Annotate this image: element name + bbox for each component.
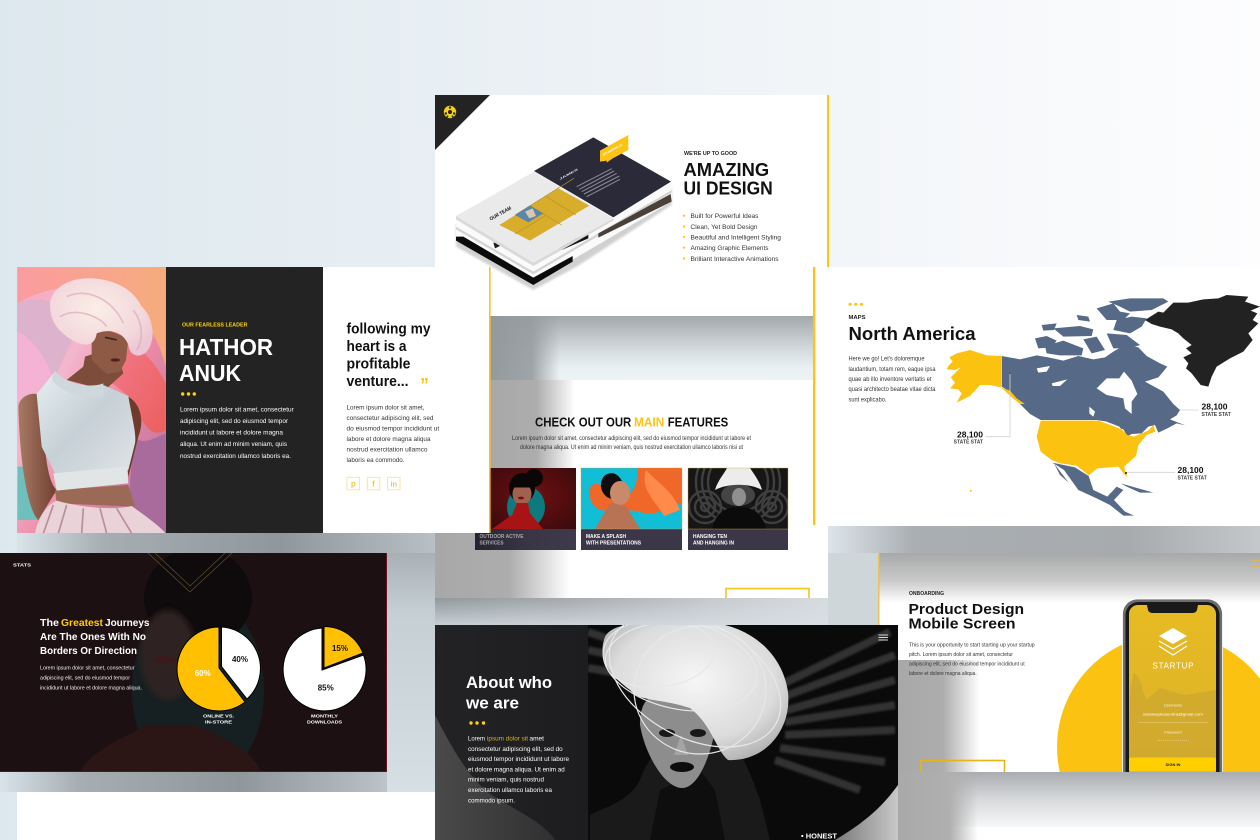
phone mockup [1122, 599, 1223, 772]
text: about body: exercitation ullamco laboris ea [468, 787, 552, 794]
region: Mexico and Central America [1052, 463, 1153, 516]
heading: greatest journeys: Borders Or Direction [40, 645, 137, 657]
isometric slide stack illustration: OUR TEAM [489, 206, 513, 222]
phone mockup: sandeepkasundra@gmail.com [1143, 712, 1204, 716]
isometric slide stack illustration: STUNNING UI [602, 143, 623, 157]
pie chart: online vs in-store: 60% [195, 669, 211, 678]
text: features intro [512, 436, 751, 451]
panel: onboarding slide [878, 553, 1260, 772]
region: Alaska [947, 350, 1025, 404]
panel: about who we are slide [435, 625, 898, 840]
text: onboarding body: labore et dolore magna aliqua. [909, 671, 977, 677]
card: hanging ten: AND HANGING IN [693, 540, 734, 546]
text: eyebrow: WE'RE UP TO GOOD [684, 151, 737, 157]
icon: menu [1251, 560, 1260, 567]
callout: west stat: 28,100 [957, 430, 983, 440]
card: make a splash [581, 468, 682, 550]
icon: startup stacked layers logo [1159, 628, 1187, 655]
callout: east stat [1202, 402, 1231, 418]
text: map description: laudantium, totam rem, eaque ipsa [848, 367, 936, 373]
text: leader bio: adipiscing elit, sed do eiusmod tempor [180, 418, 289, 425]
map of North America [947, 295, 1260, 516]
text: quote body: consectetur adipiscing elit, sed [346, 415, 434, 422]
background portrait, dimmed [80, 548, 264, 785]
panel: Hathor Anuk leader slide [17, 267, 491, 533]
heading: North America: North America [848, 323, 976, 344]
text: map description: quasi architecto beatae vitae dicta [848, 387, 936, 393]
card: outdoor active services: OUTDOOR ACTIVE [480, 534, 524, 540]
text: about body: et dolore magna aliqua. Ut enim ad [468, 766, 565, 773]
heading: check out our main features: FEATURES [668, 416, 728, 430]
heading: amazing UI design [684, 160, 773, 199]
heading: quote: following my [346, 321, 430, 337]
text: leader bio: Lorem ipsum dolor sit amet, consectetur [180, 406, 294, 414]
heading: Hathor Anuk [179, 334, 273, 386]
text: about body: consectetur adipiscing elit, sed do [468, 746, 563, 753]
callout: east stat: 28,100 [1202, 402, 1228, 412]
caption: monthly downloads: MONTHLY [311, 714, 338, 719]
decorative dots [181, 392, 196, 396]
text: about body: minim veniam, quis nostrud [468, 777, 544, 784]
caption: online vs in-store [203, 714, 234, 724]
card: outdoor active services [475, 468, 576, 550]
caption: online vs in-store: ONLINE VS. [203, 714, 234, 719]
heading: amazing UI design: UI DESIGN [684, 179, 773, 199]
pie chart: online vs in-store: 40% [232, 655, 248, 664]
card: hanging ten: HANGING TEN [693, 534, 727, 540]
heading: quote: heart is a [346, 339, 407, 355]
heading: Hathor Anuk: HATHOR [179, 334, 273, 360]
feature bullet list: Clean, Yet Bold Design [690, 224, 758, 231]
portrait photo [17, 267, 166, 533]
text: quote body: laboris ea commodo. [346, 457, 405, 464]
heading: check out our main features: MAIN [634, 416, 664, 430]
text: about body: Lorem [468, 736, 485, 742]
card: make a splash: MAKE A SPLASH [586, 534, 626, 540]
caption: monthly downloads [307, 714, 342, 724]
callout: east stat: STATE STAT [1202, 412, 1231, 418]
card: hanging ten [688, 468, 788, 550]
photo: woman with white hair [588, 625, 898, 840]
text: features intro: dolore magna aliqua. Ut enim ad minim veniam, quis nostrud exercitation ullamco laboris nisi ut [520, 445, 743, 451]
icon: menu [878, 634, 888, 640]
caption: online vs in-store: IN-STORE [205, 719, 232, 724]
text: onboarding body [909, 642, 1035, 677]
panel: amazing UI design slide [435, 95, 829, 598]
heading: about who we are [465, 673, 552, 712]
heading: product design [908, 601, 1024, 633]
pie chart: monthly downloads: 85% [318, 684, 334, 692]
text: quote body [346, 405, 439, 464]
text: quote body: do eiusmod tempor incididunt ut [346, 426, 439, 433]
text: leader bio: nostrud exercitation ullamco laboris ea. [180, 453, 291, 460]
heading: quote [346, 321, 430, 390]
text: quote body: nostrud exercitation ullamco [346, 446, 428, 454]
text: features intro: Lorem ipsum dolor sit amet, consectetur adipiscing elit, sed do eiusmod tempor incididunt ut labore et [512, 436, 751, 442]
heading: greatest journeys: The [40, 617, 59, 629]
decorative dots [848, 303, 863, 306]
bottom-right blank slide [898, 772, 1260, 840]
heading: product design: Product Design [908, 601, 1024, 618]
text: onboarding eyebrow: ONBOARDING [909, 591, 944, 597]
yellow outline button [726, 588, 809, 598]
card: outdoor active services: SERVICES [480, 540, 504, 546]
text: leader bio [180, 406, 294, 460]
text: onboarding body: adipiscing elit, sed do eiusmod tempor incididunt ut [909, 662, 1025, 668]
text: map description: Here we go! Let's doloremque [848, 357, 925, 363]
heading: amazing UI design: AMAZING [684, 160, 769, 180]
heading: quote: profitable [346, 356, 410, 372]
callout: south stat: STATE STAT [1178, 476, 1207, 482]
pie chart: online vs in-store [177, 627, 260, 711]
callout: west stat: STATE STAT [954, 440, 983, 446]
decorative dots [469, 721, 485, 725]
text: stats body: adipiscing elit, sed do eiusmod tempor [40, 676, 130, 682]
heading: Hathor Anuk: ANUK [179, 360, 241, 386]
region: Canada [1002, 298, 1185, 437]
text: stats body [40, 666, 142, 692]
phone mockup: STARTUP [1152, 662, 1194, 670]
text: stats label: STATS [13, 562, 31, 568]
heading: check out our main features [535, 416, 728, 430]
phone mockup: Password [1164, 729, 1182, 734]
social icons: p [351, 480, 356, 488]
phone mockup: Username [1164, 702, 1183, 708]
text: stats body: incididunt ut labore et dolore magna aliqua. [40, 686, 142, 692]
heading: greatest journeys: Are The Ones With No [40, 631, 146, 643]
text: about body: ipsum dolor sit [487, 736, 528, 742]
phone mockup: ················ [1156, 738, 1190, 744]
text: map description [848, 357, 936, 404]
phone mockup: SIGN IN [1166, 762, 1181, 767]
text: onboarding body: pitch. Lorem ipsum dolor sit amet, consectetur [909, 652, 1013, 658]
panel: stats slide [0, 548, 387, 785]
panel: bottom-left blank slide [17, 792, 435, 840]
text: leader bio: aliqua. Ut enim ad minim veniam, quis [180, 441, 288, 448]
heading: quote: venture... [346, 374, 408, 390]
text: our fearless leader: OUR FEARLESS LEADER [182, 322, 248, 328]
text: leader bio: incididunt ut labore et dolore magna [180, 430, 283, 436]
social icons [347, 477, 400, 490]
feature bullet list: Beautiful and Intelligent Styling [690, 234, 781, 241]
region: United States [1037, 421, 1155, 477]
heading: greatest journeys: Journeys [105, 617, 150, 629]
panel: North America map slide [828, 267, 1260, 526]
callout: south stat [1178, 465, 1207, 482]
text: stats body: Lorem ipsum dolor sit amet, consectetur [40, 666, 135, 672]
feature bullet list: Amazing Graphic Elements [690, 245, 769, 252]
text: quote body: labore et dolore magna aliqua [346, 436, 431, 443]
shadow gaps between slides [0, 526, 1260, 792]
text: about body: amet [530, 736, 544, 742]
callout: west stat [954, 430, 983, 446]
text: about body: eiusmod tempor incididunt ut labore [468, 756, 569, 763]
feature bullet list: Brilliant Interactive Animations [690, 256, 779, 263]
feature bullet list [683, 213, 781, 263]
text: maps eyebrow: MAPS [848, 315, 866, 321]
heading: about who we are: About who [466, 673, 552, 692]
heading: greatest journeys [40, 617, 150, 657]
pie chart: monthly downloads: 15% [332, 644, 348, 653]
text: map description: quae ab illo inventore veritatis et [848, 377, 932, 383]
isometric slide stack illustration: JAMES [559, 167, 579, 181]
yellow outline button [921, 760, 1004, 774]
social icons: f [372, 480, 375, 488]
text: onboarding body: This is your opportunity to start starting up your startup [909, 642, 1035, 648]
card: make a splash: WITH PRESENTATIONS [586, 540, 642, 546]
panel: check out our main features lower slide [435, 267, 815, 598]
region: Greenland [1145, 295, 1260, 387]
heading: product design: Mobile Screen [908, 616, 1016, 633]
text: map description: sunt explicabo. [848, 398, 887, 404]
heading: check out our main features: CHECK OUT OUR [535, 416, 631, 430]
icon: closing quote mark: ” [420, 375, 429, 395]
text: quote body: Lorem ipsum dolor sit amet, [346, 405, 425, 412]
feature bullet list: Built for Powerful Ideas [690, 213, 759, 220]
heading: greatest journeys: Greatest [61, 617, 103, 629]
region: Hudson Bay [1037, 366, 1137, 435]
yellow circle [1057, 644, 1260, 772]
callout lines [985, 374, 1198, 472]
isometric slide stack illustration [456, 135, 672, 290]
callout: south stat: 28,100 [1178, 465, 1204, 475]
caption: monthly downloads: DOWNLOADS [307, 719, 342, 724]
social icons: in [390, 480, 398, 488]
heading: about who we are: we are [465, 694, 519, 712]
text: about body [468, 736, 569, 804]
text: about body: commodo ipsum. [468, 797, 515, 804]
icon: corner triangle with logo [435, 95, 490, 150]
pie chart: monthly downloads [283, 626, 366, 711]
